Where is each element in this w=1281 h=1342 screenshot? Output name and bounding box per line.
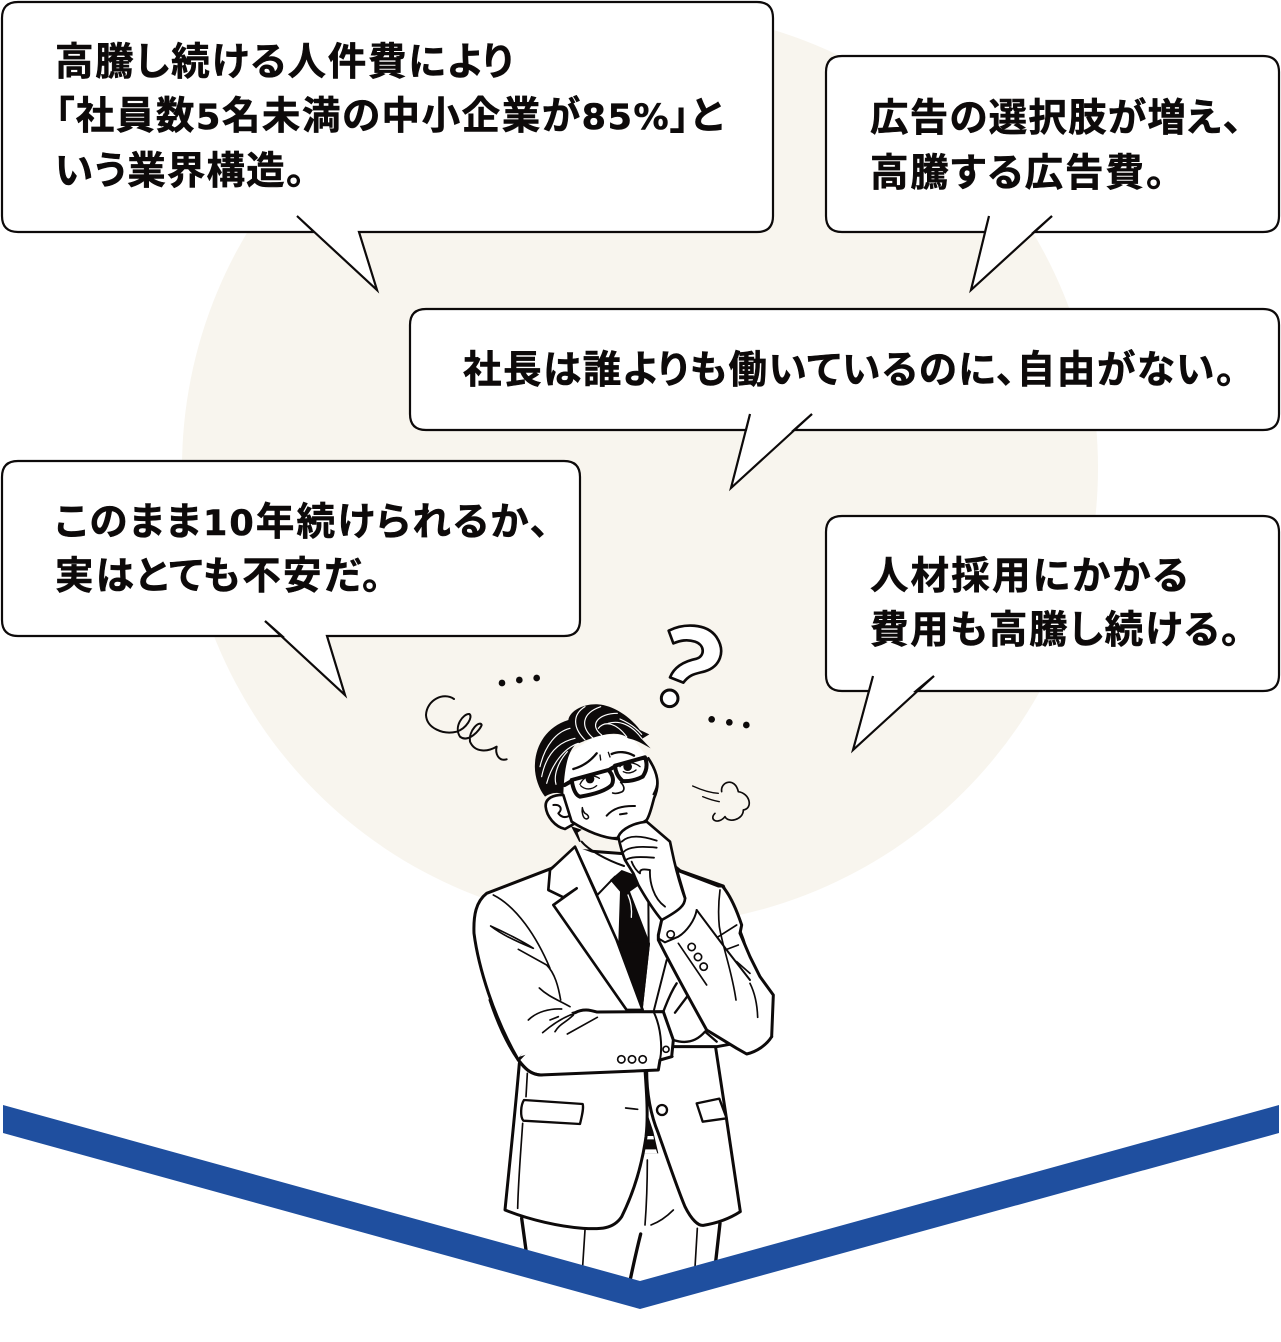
trousers	[522, 1107, 722, 1283]
sleeve cuff	[658, 910, 697, 942]
speech bubble: advertising costs: 高騰する広告費。	[870, 152, 1165, 195]
background circle	[182, 10, 1098, 926]
eyes	[580, 762, 640, 789]
speech bubble: labour costs: いう業界構造。	[55, 150, 305, 193]
cuff buttons left	[618, 1046, 669, 1063]
jacket	[474, 850, 772, 1229]
glasses	[565, 757, 647, 797]
arms	[490, 895, 717, 1075]
nose and mouth	[613, 782, 624, 793]
speech bubble: anxiety about next ten years	[2, 461, 580, 695]
ear	[546, 795, 575, 829]
shirt	[576, 847, 650, 1010]
icon: ellipsis dots left	[499, 675, 540, 686]
speech bubble: advertising costs: 広告の選択肢が増え、	[870, 97, 1242, 140]
neck shadow	[573, 828, 580, 842]
icon: thought marks around head	[426, 626, 750, 821]
left lapel	[548, 847, 643, 1010]
torso	[474, 850, 772, 1060]
speech bubble: recruitment costs: 費用も高騰し続ける。	[870, 609, 1240, 652]
icon: sigh puff	[693, 782, 749, 821]
speech bubble: recruitment costs: 人材採用にかかる	[870, 555, 1188, 598]
speech bubble: labour costs: 高騰し続ける人件費により	[55, 41, 513, 84]
icon: confusion squiggle	[426, 696, 507, 760]
cuff buttons right	[667, 931, 707, 970]
speech bubble: president has no freedom	[410, 309, 1279, 488]
eyebrows and wrinkles	[573, 752, 634, 769]
icon: ellipsis dots right	[708, 716, 750, 728]
sweat drop	[582, 808, 589, 819]
right jacket panel	[647, 1027, 740, 1225]
speech bubble: labour costs: 「社員数5名未満の中小企業が85%」と	[55, 95, 723, 138]
face	[563, 735, 657, 839]
belt	[643, 1107, 658, 1153]
necktie	[610, 870, 650, 1010]
hand on chin	[618, 822, 685, 920]
speech bubble: recruitment costs	[826, 516, 1279, 750]
left jacket panel	[505, 1063, 647, 1229]
illustration: thinking businessman	[426, 626, 773, 1283]
hair highlights	[540, 707, 642, 784]
raised sleeve	[658, 870, 773, 1054]
speech bubble: anxiety about next ten years: 実はとても不安だ。	[55, 555, 381, 598]
raised arm and hand	[603, 822, 773, 1054]
folded forearm	[518, 1010, 673, 1075]
head	[535, 704, 657, 842]
blue V-shaped band	[3, 1105, 1279, 1309]
speech bubble: president has no freedom: 社長は誰よりも働いているのに、自由がない。	[463, 349, 1235, 392]
speech bubble: advertising costs	[826, 56, 1279, 290]
hair	[535, 704, 651, 797]
shirt, tie and lapel	[548, 842, 650, 1010]
speech bubble: anxiety about next ten years: このまま10年続けられるか、	[55, 501, 549, 544]
speech bubble: labour costs	[2, 2, 773, 290]
icon: question mark	[661, 626, 721, 707]
pocket flaps and button	[521, 1100, 583, 1124]
